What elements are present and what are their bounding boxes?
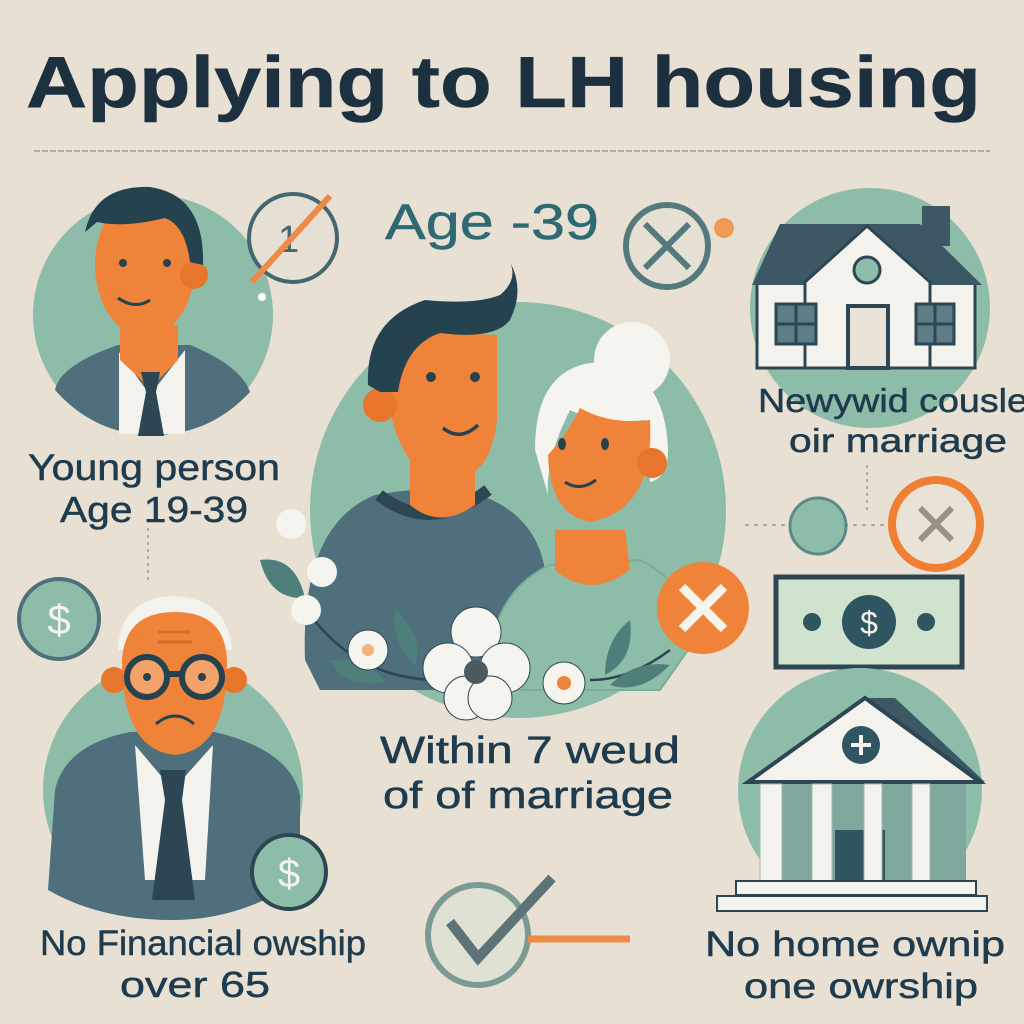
panel: elderly person — [43, 596, 303, 920]
icon: orange ring with cross — [892, 480, 980, 568]
age heading: Age -39 — [385, 194, 599, 250]
elderly label: No Financial owship — [40, 924, 366, 963]
icon: floral wreath — [260, 509, 670, 720]
centre label: Within 7 weud — [380, 730, 680, 772]
icon: orange cross badge — [657, 562, 749, 654]
bank label — [705, 925, 1005, 1006]
panel: couple — [305, 262, 726, 718]
panel: young person — [33, 187, 273, 436]
young person label: Young person — [28, 447, 280, 488]
icon: clock with orange pen — [249, 194, 337, 301]
elderly label: over 65 — [120, 964, 270, 1005]
newlywed label — [758, 382, 1024, 459]
panel: newlywed house — [750, 188, 990, 428]
icon: banknote — [776, 577, 962, 667]
icon: dollar coin left — [19, 579, 99, 659]
elderly label — [40, 924, 366, 1005]
title: Applying to LH housing — [26, 43, 981, 123]
panel: bank building — [717, 668, 987, 912]
centre label — [380, 730, 680, 817]
icon: clock with orange pen: 1 — [278, 219, 299, 261]
bank label: No home ownip — [705, 925, 1005, 964]
centre label: of of marriage — [383, 775, 673, 817]
newlywed label: oir marriage — [789, 422, 1007, 459]
newlywed label: Newywid cousle — [758, 382, 1024, 419]
icon: check mark coin — [428, 878, 630, 985]
young person label: Age 19-39 — [60, 489, 248, 530]
young person label — [28, 447, 280, 530]
icon: cross circle top — [626, 205, 734, 287]
icon: dollar coin on suit: $ — [278, 852, 300, 896]
icon: dollar coin left: $ — [47, 596, 71, 643]
icon: dollar coin on suit — [252, 835, 326, 909]
icon: small teal coin — [790, 498, 846, 554]
icon: banknote: $ — [860, 605, 878, 641]
bank label: one owrship — [744, 967, 978, 1006]
